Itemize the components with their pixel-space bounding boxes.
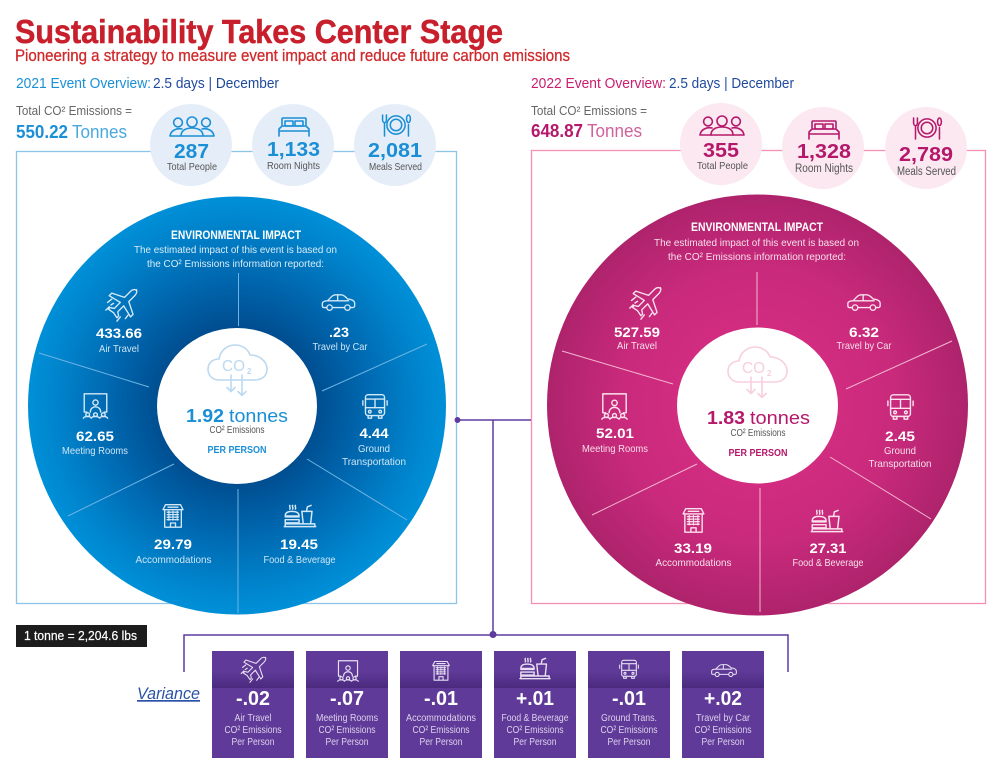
stat: meals served 2022: [885, 107, 967, 189]
impact heading 2021: the CO² Emissions information reported:: [147, 258, 324, 270]
segment: accommodations 2021: [136, 505, 212, 566]
2022 overview heading: 2022 Event Overview:: [531, 75, 666, 92]
2021 total emissions: [16, 104, 132, 142]
variance card: air travel: Air Travel: [234, 712, 272, 724]
variance card: food and beverage: [494, 651, 576, 758]
variance label: Variance: [137, 684, 200, 703]
variance card: travel by car: CO² Emissions: [694, 724, 752, 736]
2022 overview heading: [531, 75, 794, 92]
variance card: travel by car: Per Person: [702, 736, 745, 748]
2021 total emissions: 550.22: [16, 122, 68, 142]
segment: food and beverage 2021: 19.45: [280, 536, 318, 552]
2022 overview heading: 2.5 days | December: [669, 75, 794, 92]
variance card: meeting rooms: Meeting Rooms: [316, 712, 378, 724]
segment: travel by car 2021: Travel by Car: [312, 341, 368, 353]
stat: total people 2022: [680, 103, 762, 185]
icon: CO2 cloud 2021: CO: [222, 358, 245, 375]
variance card: food and beverage: +.01: [516, 688, 554, 710]
stat: room nights 2021: Room Nights: [267, 160, 320, 172]
impact heading 2022: the CO² Emissions information reported:: [668, 251, 846, 263]
segment: air travel 2021: 433.66: [96, 325, 142, 341]
per person centre 2022: tonnes: [750, 407, 810, 428]
title: Sustainability Takes Center Stage: [15, 13, 503, 50]
variance card: ground transportation: Per Person: [608, 736, 651, 748]
donut chart 2022: [547, 194, 968, 616]
variance card: travel by car: Travel by Car: [696, 712, 750, 724]
stat: meals served 2022: 2,789: [899, 144, 953, 166]
icon: CO2 cloud 2022: [728, 347, 787, 398]
2022 total emissions: Total CO² Emissions =: [531, 104, 647, 118]
segment: air travel 2021: [96, 290, 142, 355]
variance card: meeting rooms: Per Person: [326, 736, 369, 748]
segment: accommodations 2022: 33.19: [674, 540, 712, 556]
per person centre 2021: CO² Emissions: [210, 425, 264, 436]
segment: food and beverage 2021: [264, 505, 336, 566]
stat: room nights 2022: Room Nights: [795, 163, 853, 175]
2022 frame: [532, 150, 986, 604]
segment: meeting rooms 2022: Meeting Rooms: [582, 443, 648, 455]
segment: travel by car 2021: [312, 295, 368, 353]
per person centre 2022: 1.83: [707, 407, 745, 428]
variance card: travel by car: +.02: [704, 688, 742, 710]
segment: accommodations 2022: [656, 509, 732, 569]
2021 frame: [16, 152, 456, 604]
icon: CO2 cloud 2021: [208, 345, 267, 396]
segment: food and beverage 2022: Food & Beverage: [792, 557, 864, 569]
segment: ground transportation 2022: 2.45: [885, 428, 915, 444]
per person centre 2021: tonnes: [229, 405, 288, 426]
variance card: ground transportation: Ground Trans.: [601, 712, 657, 724]
segment: air travel 2021: Air Travel: [99, 343, 139, 355]
per person centre 2021: [157, 328, 317, 484]
segment: ground transportation 2021: Transportation: [342, 456, 406, 468]
unit note: [16, 625, 147, 647]
segment: ground transportation 2021: [342, 395, 406, 468]
segment: food and beverage 2021: Food & Beverage: [264, 554, 336, 566]
icon: CO2 cloud 2022: CO: [742, 360, 765, 377]
impact heading 2021: [134, 230, 337, 270]
stat: meals served 2022: Meals Served: [897, 166, 956, 178]
variance card: air travel: [212, 651, 294, 758]
2021 total emissions: Total CO² Emissions =: [16, 104, 132, 118]
variance card: travel by car: [682, 651, 764, 758]
stat: total people 2021: [150, 104, 232, 186]
per person centre 2021: PER PERSON: [208, 444, 266, 456]
segment: ground transportation 2022: Transportation: [868, 458, 932, 470]
2022 total emissions: [531, 104, 647, 141]
impact heading 2022: The estimated impact of this event is based on: [654, 237, 859, 249]
stat: room nights 2022: 1,328: [797, 141, 851, 163]
stat: meals served 2021: [354, 104, 436, 186]
segment: travel by car 2022: [836, 295, 892, 352]
stat: meals served 2021: 2,081: [368, 140, 422, 162]
segment: travel by car 2022: Travel by Car: [836, 340, 892, 352]
segment: food and beverage 2022: 27.31: [810, 540, 847, 556]
icon: CO2 cloud 2021: 2: [247, 367, 252, 376]
segment: ground transportation 2022: Ground: [884, 445, 916, 457]
stat: total people 2022: Total People: [697, 160, 748, 172]
variance card: air travel: Per Person: [232, 736, 275, 748]
variance card: meeting rooms: [306, 651, 388, 758]
stat: room nights 2022: [782, 107, 864, 189]
segment: food and beverage 2022: [792, 510, 864, 569]
stat: total people 2021: 287: [174, 141, 209, 163]
variance card: accommodations: [400, 651, 482, 758]
segment: accommodations 2021: 29.79: [154, 536, 192, 552]
donut chart 2021: [28, 196, 446, 614]
variance card: accommodations: -.01: [424, 688, 458, 710]
segment: ground transportation 2022: [868, 395, 932, 470]
segment: accommodations 2021: Accommodations: [136, 554, 212, 566]
variance card: ground transportation: [588, 651, 670, 758]
2021 total emissions: Tonnes: [72, 122, 127, 142]
variance card: air travel: -.02: [236, 688, 270, 710]
icon: CO2 cloud 2022: 2: [767, 369, 772, 378]
2022 total emissions: 648.87: [531, 121, 583, 141]
2021 overview heading: 2021 Event Overview:: [16, 75, 151, 92]
per person centre 2022: CO² Emissions: [730, 428, 786, 439]
segment: meeting rooms 2022: 52.01: [596, 425, 634, 441]
per person centre 2021: 1.92: [186, 405, 224, 426]
variance card: food and beverage: Per Person: [514, 736, 557, 748]
impact heading 2022: ENVIRONMENTAL IMPACT: [691, 222, 823, 234]
segment: meeting rooms 2021: Meeting Rooms: [62, 445, 128, 457]
segment: ground transportation 2021: 4.44: [360, 425, 389, 441]
impact heading 2021: ENVIRONMENTAL IMPACT: [171, 230, 301, 242]
variance card: accommodations: Accommodations: [406, 712, 476, 724]
segment: meeting rooms 2022: [582, 394, 648, 455]
segment: accommodations 2022: Accommodations: [656, 557, 732, 569]
unit note: 1 tonne = 2,204.6 lbs: [24, 629, 137, 643]
panel: 2022 event: [531, 75, 986, 616]
variance connector: [184, 418, 788, 672]
stat: total people 2022: 355: [703, 140, 739, 162]
variance card: meeting rooms: CO² Emissions: [318, 724, 376, 736]
impact heading 2022: [654, 222, 859, 263]
panel: 2021 event: [16, 75, 456, 614]
variance card: food and beverage: CO² Emissions: [506, 724, 564, 736]
per person centre 2022: [677, 328, 838, 484]
stat: meals served 2021: Meals Served: [369, 161, 422, 173]
2022 total emissions: Tonnes: [587, 121, 642, 141]
variance card: air travel: CO² Emissions: [224, 724, 282, 736]
segment: ground transportation 2021: Ground: [358, 443, 390, 455]
impact heading 2021: The estimated impact of this event is based on: [134, 244, 337, 256]
segment: air travel 2022: Air Travel: [617, 340, 657, 352]
variance card: ground transportation: -.01: [612, 688, 646, 710]
per person centre 2022: PER PERSON: [728, 447, 788, 459]
segment: travel by car 2022: 6.32: [849, 324, 879, 340]
segment: air travel 2022: [614, 288, 661, 352]
variance card: accommodations: Per Person: [420, 736, 463, 748]
segment: meeting rooms 2021: 62.65: [76, 428, 114, 444]
segment: air travel 2022: 527.59: [614, 324, 660, 340]
variance card: meeting rooms: -.07: [330, 688, 364, 710]
segment: meeting rooms 2021: [62, 394, 128, 457]
2021 overview heading: [16, 75, 279, 92]
2021 overview heading: 2.5 days | December: [153, 75, 279, 92]
stat: room nights 2021: 1,133: [267, 139, 320, 161]
variance card: food and beverage: Food & Beverage: [502, 712, 569, 724]
variance card: ground transportation: CO² Emissions: [600, 724, 658, 736]
stat: room nights 2021: [252, 104, 334, 186]
stat: total people 2021: Total People: [167, 161, 217, 173]
segment: travel by car 2021: .23: [329, 324, 349, 340]
subtitle: Pioneering a strategy to measure event impact and reduce future carbon emissions: [15, 46, 570, 65]
variance card: accommodations: CO² Emissions: [412, 724, 470, 736]
